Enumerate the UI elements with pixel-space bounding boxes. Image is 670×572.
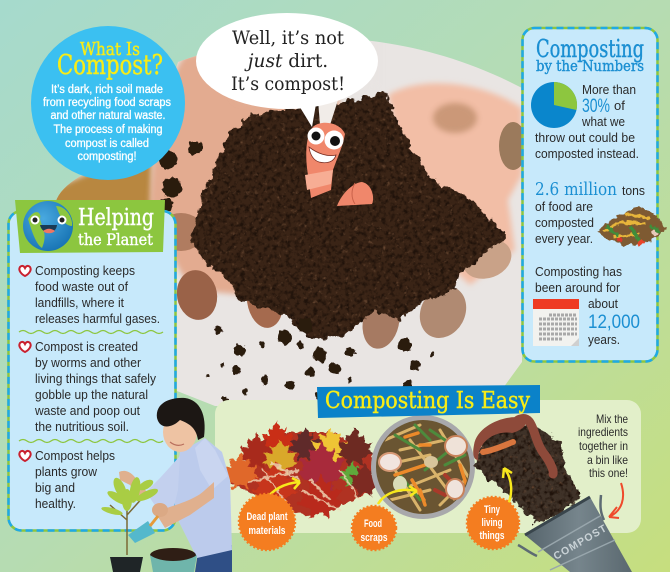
bowl of food scraps [371, 415, 475, 519]
what is compost body text: compost is called [65, 138, 149, 150]
arrow: food scraps [378, 486, 417, 504]
stat: 12,000 years: years. [588, 332, 620, 347]
panel: composting is easy [215, 385, 641, 572]
caption: mix the ingredients: together in [579, 439, 628, 453]
caption: mix the ingredients: Mix the [596, 412, 628, 426]
bullet: landfills [19, 263, 160, 326]
compost pile and earthworm [473, 417, 580, 522]
plant in pot [101, 476, 160, 572]
bullet: worms: waste and poop out [34, 403, 140, 418]
heading text: the Planet [78, 230, 154, 249]
numbers heading: by the Numbers [536, 57, 644, 75]
stat: 30 percent: of [614, 98, 625, 113]
trowel [128, 521, 155, 543]
bullet: plants: big and [35, 480, 75, 495]
badge: tiny living things [467, 497, 519, 549]
teal pot with soil [150, 548, 197, 572]
bullet: worms: by worms and other [35, 355, 142, 370]
badge: tiny living things: Tiny [484, 504, 501, 516]
what is compost body text [43, 84, 171, 163]
bullet: worms: living things that safely [35, 371, 156, 386]
bullet: worms: Compost is created [35, 339, 138, 354]
speech text [231, 28, 345, 95]
what is compost body text: from recycling food scraps [43, 97, 171, 109]
panel: what is compost [31, 26, 185, 180]
badge: tiny living things: living [482, 517, 502, 529]
panel: composting by the numbers [522, 28, 667, 362]
badge: food scraps: Food [364, 518, 382, 530]
bullet: plants: plants grow [35, 464, 98, 479]
stat: 12,000 years: Composting has [535, 264, 622, 279]
stat: 2.6 million tons: every year. [535, 231, 593, 246]
arrow: to bin [609, 483, 623, 518]
badge: food scraps [352, 506, 396, 550]
stat: 30 percent: what we [581, 114, 625, 129]
heading banner [15, 200, 165, 253]
what is compost body text: The process of making [54, 124, 162, 136]
stat: 2.6 million tons: 2.6 million [535, 179, 617, 200]
bullet: plants: healthy. [35, 496, 76, 511]
photo: hands holding soil [56, 40, 522, 406]
bullet: plants [19, 448, 115, 511]
stat: 12,000 years: been around for [535, 280, 621, 295]
bullet: worms: gobble up the natural [35, 387, 148, 402]
stat: 2.6 million tons: composted [535, 215, 594, 230]
stat: 30 percent: composted instead. [535, 146, 639, 161]
heading: what is compost: Compost? [57, 50, 163, 81]
badge: dead plant materials: Dead plant [246, 511, 288, 523]
icon: smiling earth [23, 201, 73, 251]
bullet: worms: the nutritious soil. [35, 419, 129, 434]
bullet: plants: Compost helps [35, 448, 115, 463]
speech text: Well, it’s not [232, 28, 345, 49]
stat: 2.6 million tons: of food are [535, 199, 593, 214]
worm character [305, 123, 373, 206]
badge: dead plant materials: materials [248, 525, 286, 537]
stat: 2.6 million tons: tons [622, 183, 645, 198]
compost bin [518, 495, 632, 572]
boy planting [101, 398, 232, 572]
pie chart: 30% [531, 82, 577, 128]
stat: 12,000 years: 12,000 [588, 312, 640, 333]
arrow: tiny living things [503, 468, 512, 512]
what is compost body text: and other natural waste. [50, 110, 166, 122]
bullet: landfills: landfills, where it [35, 295, 124, 310]
heading: what is compost: What Is [80, 39, 140, 60]
caption: mix the ingredients: this one! [589, 466, 628, 480]
caption: mix the ingredients: a bin like [587, 453, 628, 467]
stat: 30 percent: More than [582, 82, 636, 97]
stat: 12,000 years: about [588, 296, 618, 311]
badge: dead plant materials [239, 494, 295, 550]
caption: mix the ingredients [578, 412, 628, 480]
speech text: just dirt. [244, 51, 328, 72]
speech text: It’s compost! [231, 74, 345, 95]
bullet: landfills: Composting keeps [35, 263, 135, 278]
stat: 12,000 years [535, 264, 640, 347]
badge: tiny living things: things [480, 530, 504, 542]
bullet: landfills: food waste out of [35, 279, 128, 294]
heading text [78, 205, 154, 249]
stat: 30 percent: 30% [582, 96, 610, 117]
arrow: dead plant [266, 478, 300, 500]
caption: mix the ingredients: ingredients [578, 425, 628, 439]
speech bubble [196, 13, 378, 127]
heading: what is compost [57, 39, 163, 81]
stat: 30 percent: throw out could be [535, 130, 635, 145]
badge: food scraps: scraps [360, 532, 388, 544]
banner: composting is easy: Composting Is Easy [325, 388, 530, 414]
bullet: landfills: releases harmful gases. [35, 311, 160, 326]
leaf pile [221, 421, 382, 519]
numbers heading [536, 35, 644, 75]
bullet: worms [19, 339, 156, 434]
icon: food scraps pile [598, 206, 667, 246]
stat: 2.6 million tons [535, 179, 645, 246]
stat: 30 percent [535, 82, 639, 161]
panel: helping the planet [8, 200, 176, 530]
heading text: Helping [78, 205, 154, 231]
compost bin: COMPOST [552, 522, 610, 563]
what is compost body text: composting! [78, 151, 136, 163]
icon: calendar [533, 299, 579, 346]
what is compost body text: It’s dark, rich soil made [51, 84, 163, 96]
